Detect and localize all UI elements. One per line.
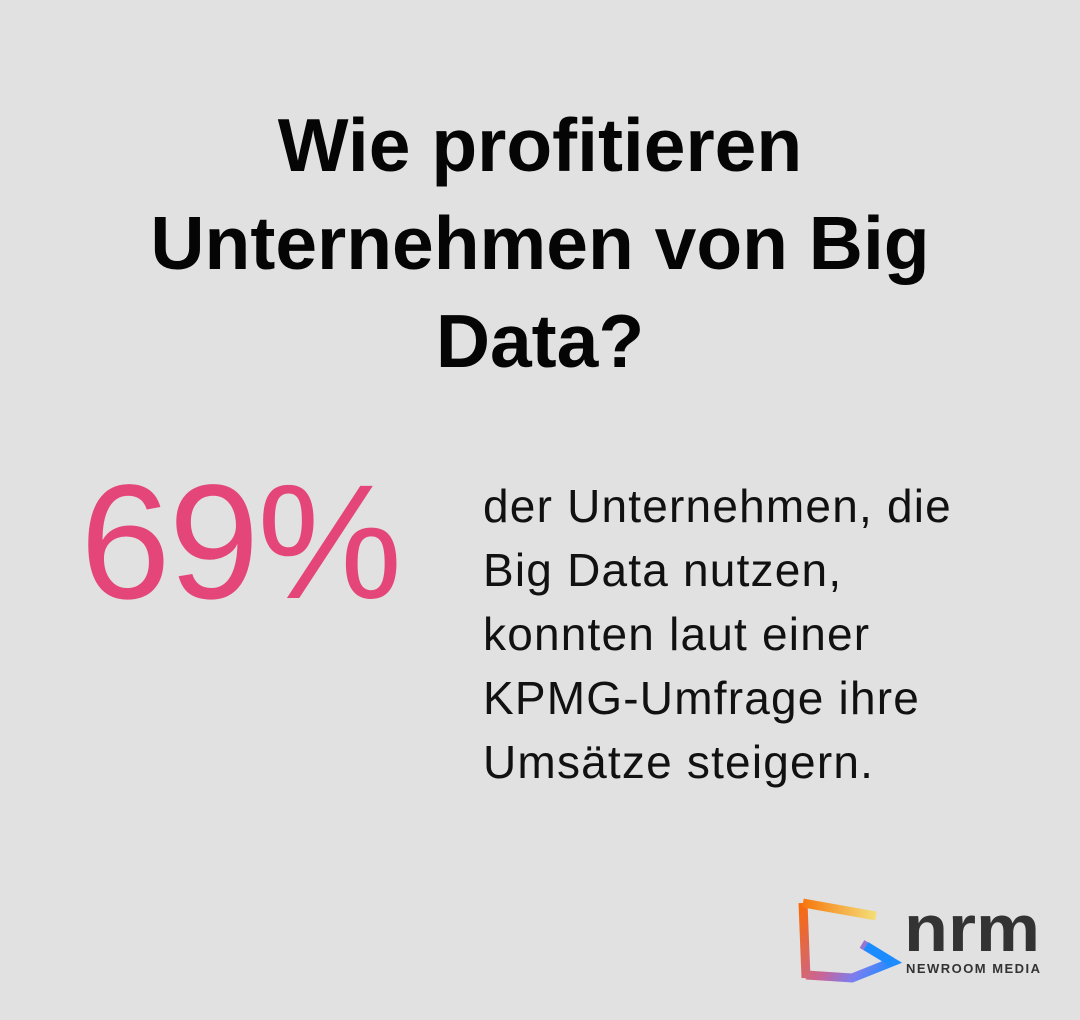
- statistic: 69%: 69%: [80, 450, 400, 633]
- title: Data?: [436, 299, 644, 383]
- text block: description: der Unternehmen, die: [483, 480, 952, 532]
- title: Unternehmen von Big: [150, 201, 930, 285]
- logo: nrm newroom media: NEWROOM MEDIA: [906, 961, 1041, 976]
- title: Wie profitieren: [278, 103, 802, 187]
- text block: description: Big Data nutzen,: [483, 544, 842, 596]
- text block: description: KPMG-Umfrage ihre: [483, 672, 920, 724]
- title: [150, 103, 930, 383]
- text block: description: konnten laut einer: [483, 608, 870, 660]
- text block: description: [483, 480, 952, 788]
- text block: description: Umsätze steigern.: [483, 736, 874, 788]
- logo: nrm newroom media: [798, 895, 1041, 982]
